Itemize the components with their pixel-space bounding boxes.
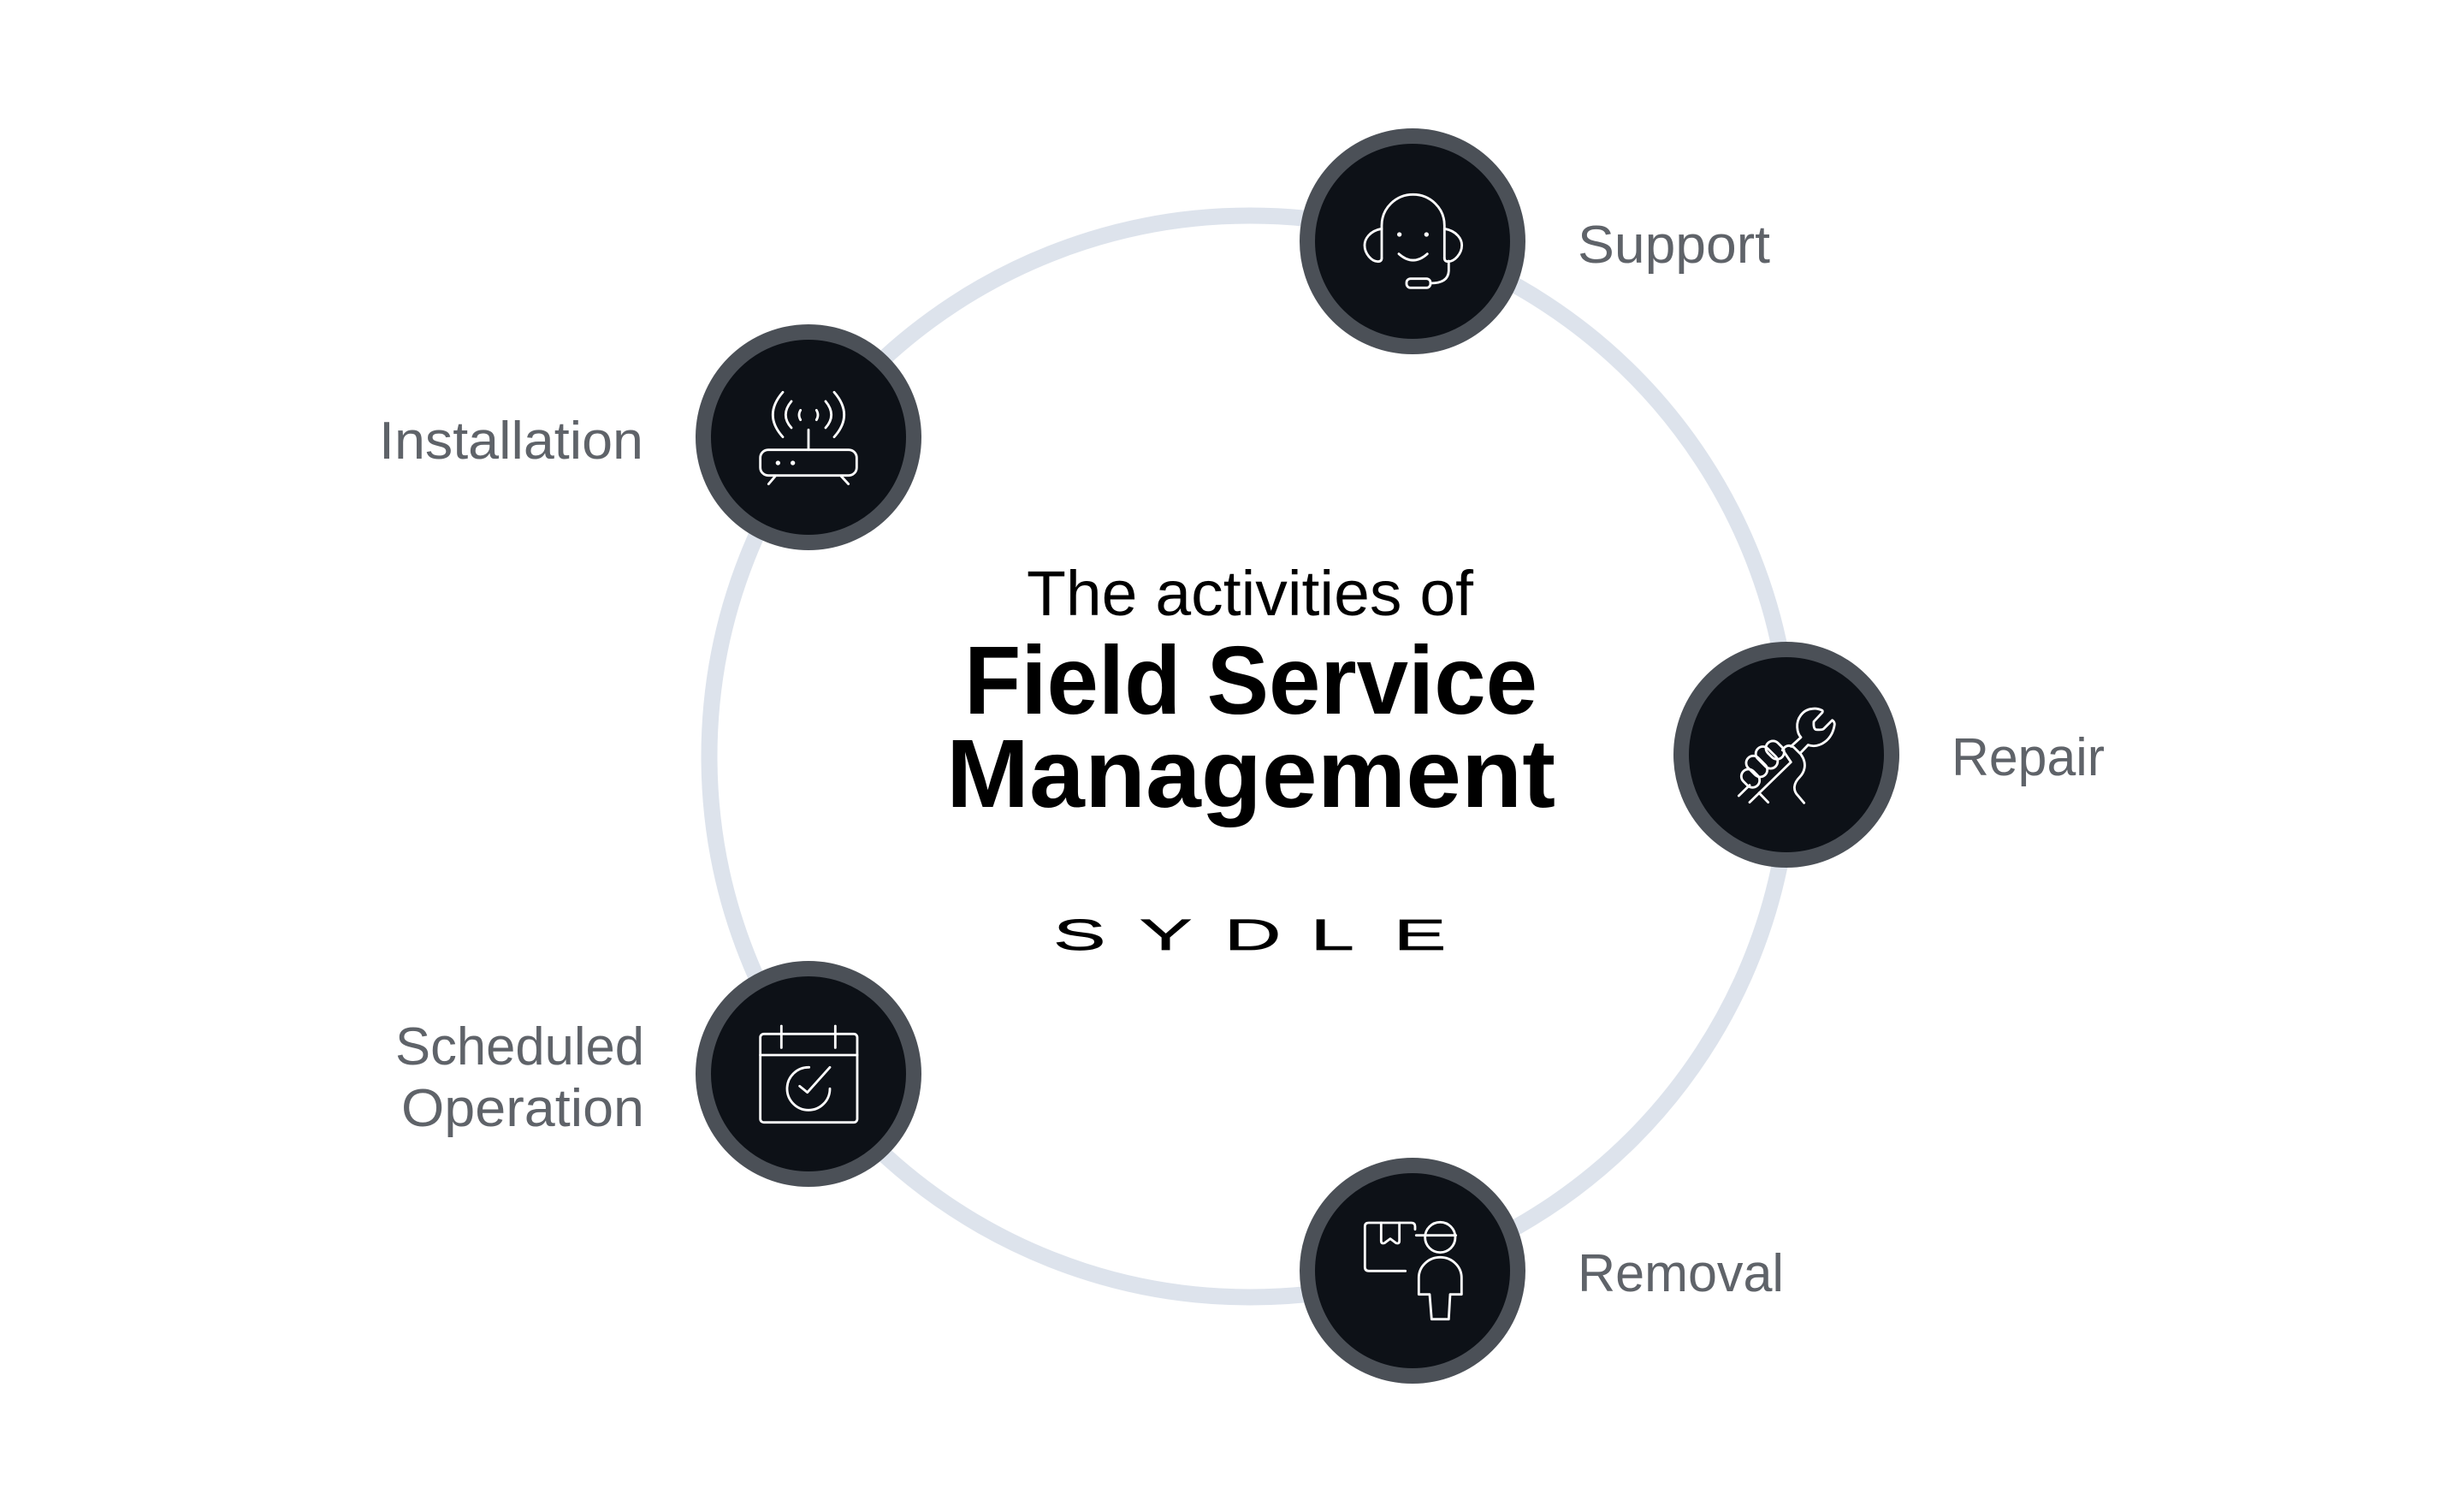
icon: calendar with check <box>761 1026 857 1123</box>
label: Support: Support <box>1578 216 1770 275</box>
icon: hand holding wrench <box>1738 709 1834 803</box>
label: Scheduled Operation: Scheduled <box>395 1017 644 1076</box>
node: Repair <box>1681 649 1892 860</box>
icon: headset smiley <box>1365 194 1462 288</box>
title <box>946 558 1555 827</box>
icon: wifi router <box>761 392 856 484</box>
icon: worker with package <box>1365 1222 1461 1319</box>
title line: Field Service: Field Service <box>964 626 1537 734</box>
node: Scheduled Operation <box>703 969 914 1179</box>
label: Scheduled Operation <box>395 1017 644 1138</box>
node: Installation <box>703 332 914 543</box>
label: Repair: Repair <box>1952 728 2105 787</box>
node: Removal <box>1307 1165 1518 1376</box>
label: Installation: Installation <box>379 412 643 471</box>
cycle ring <box>709 216 1791 1297</box>
logo: SYDLE wordmark: SYDLE <box>1053 910 1446 959</box>
node: Support <box>1307 136 1518 347</box>
label: Removal: Removal <box>1578 1244 1784 1303</box>
title line: Management: Management <box>946 720 1555 827</box>
title line: The activities of: The activities of <box>1027 558 1473 629</box>
label: Scheduled Operation: Operation <box>401 1079 644 1138</box>
